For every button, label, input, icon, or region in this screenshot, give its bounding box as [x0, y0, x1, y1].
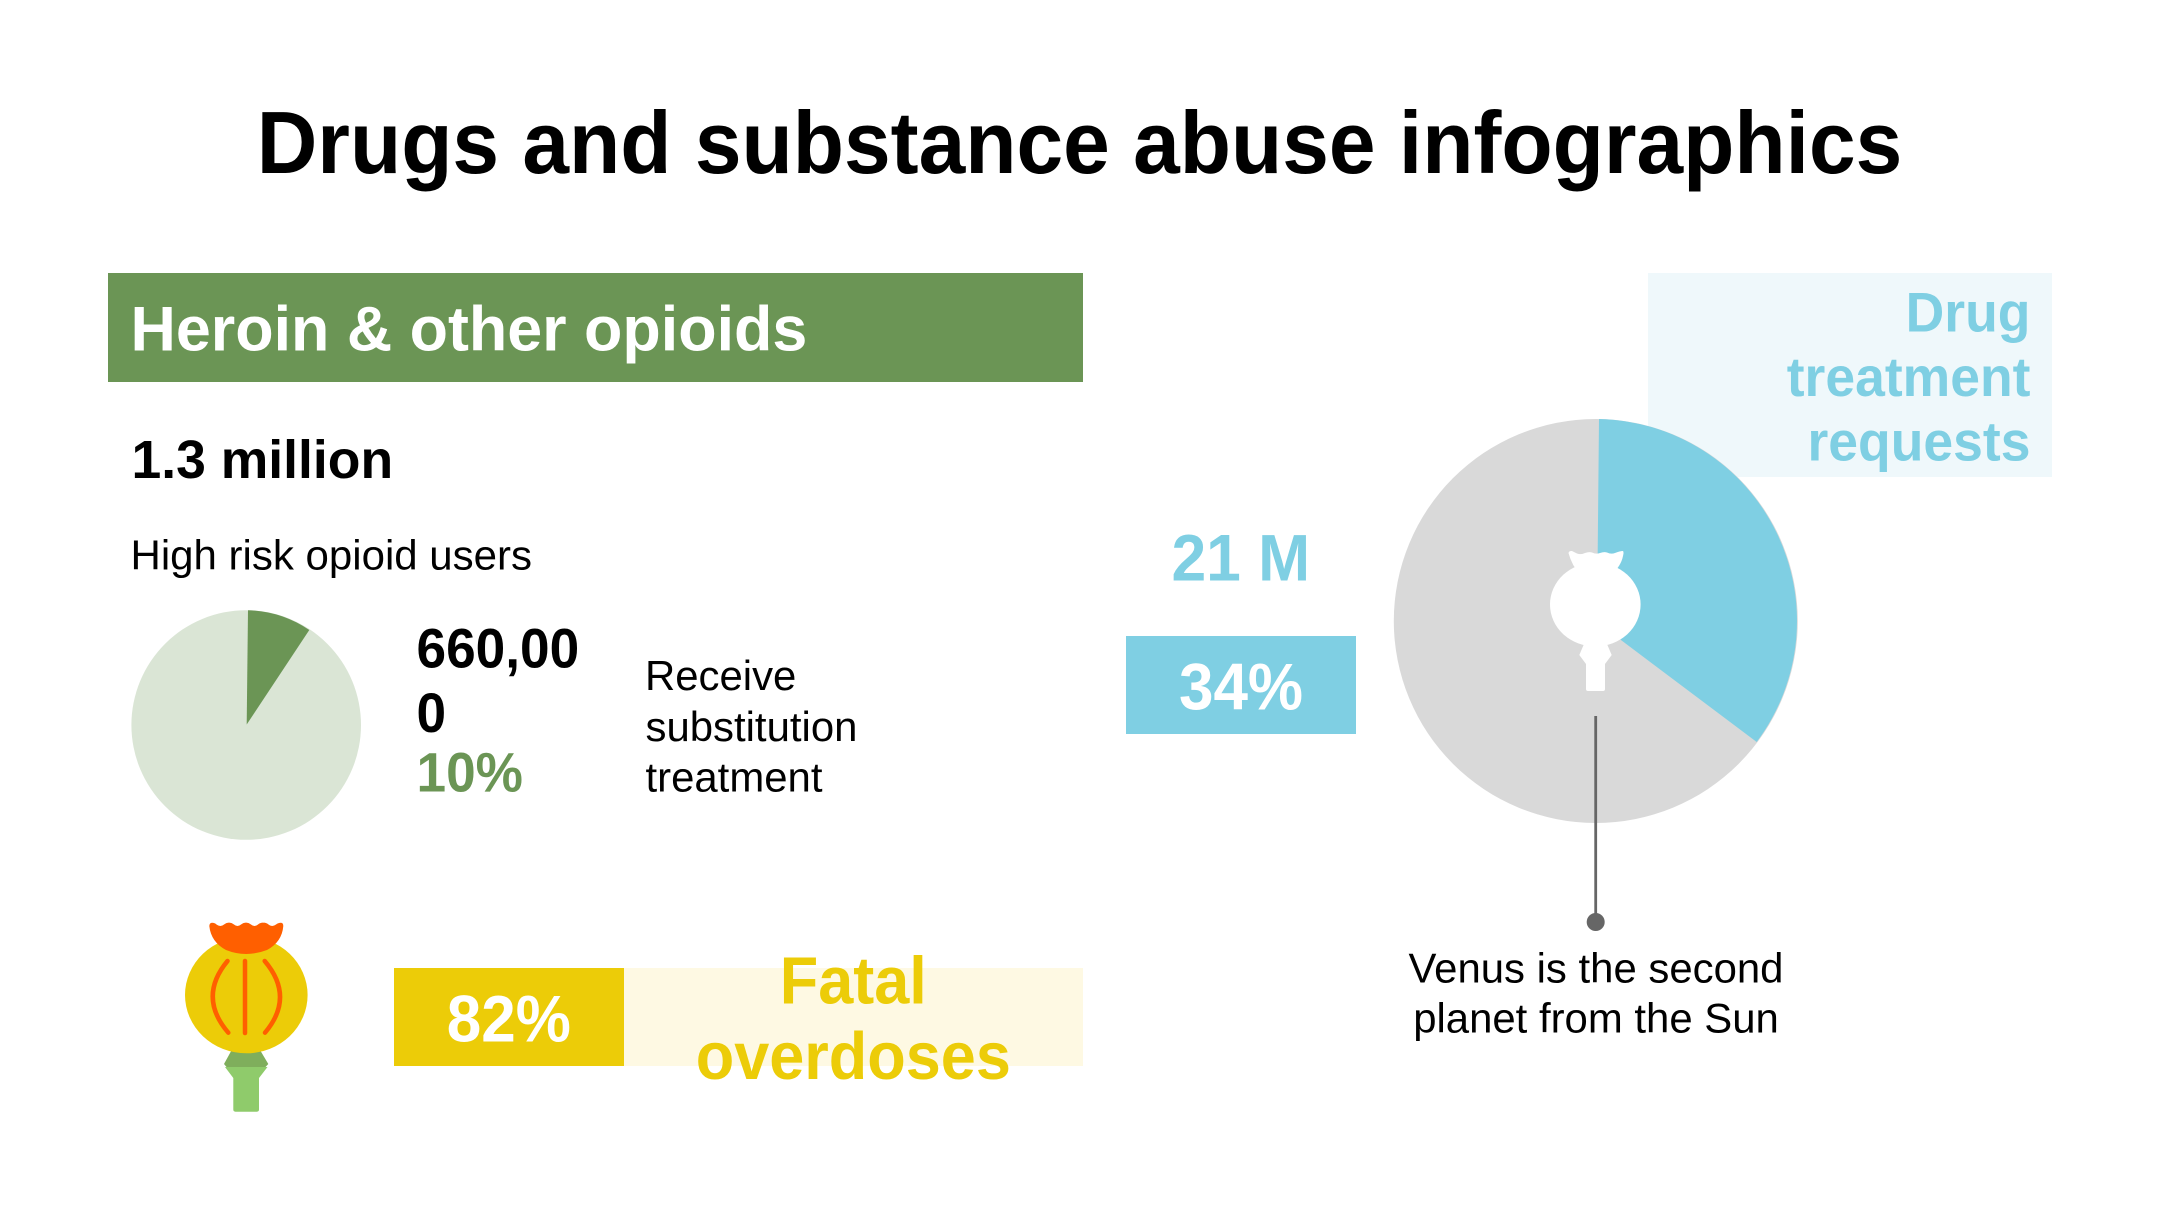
label box: fatal overdoses: overdoses [696, 1018, 1011, 1093]
stat box: 34%: 34% [1179, 650, 1303, 724]
heading banner [108, 273, 1083, 382]
stat: 660,000 and 10%: 660,00 [416, 617, 579, 680]
text: venus note [1409, 944, 1783, 1042]
label box: drug treatment requests: Drug [1906, 282, 2030, 344]
stat: 1.3 million: 1.3 million [132, 431, 393, 490]
leader line with dot [1587, 716, 1605, 931]
text: receive substitution treatment [645, 652, 857, 800]
pie chart: 34 percent [1394, 419, 1798, 823]
label box: fatal overdoses [624, 943, 1083, 1093]
heading banner: Heroin & other opioids [130, 294, 807, 364]
label box: drug treatment requests: treatment [1787, 346, 2030, 408]
stat: 660,000 and 10%: 10% [416, 741, 523, 804]
pie chart: 10 percent [131, 610, 361, 840]
panel: drug treatment requests [1126, 273, 2052, 1042]
label box: drug treatment requests: requests [1807, 411, 2030, 473]
stat box: 82%: 82% [447, 982, 571, 1056]
title: Drugs and substance abuse infographics [257, 94, 1902, 192]
stat: 660,000 and 10%: 0 [416, 682, 446, 744]
stat box: 82% [394, 968, 624, 1066]
label box: fatal overdoses: Fatal [780, 943, 927, 1018]
text: venus note: Venus is the second [1409, 944, 1783, 992]
text: receive substitution treatment: Receive [645, 652, 796, 699]
label box: drug treatment requests [1648, 273, 2052, 477]
icon: coloured poppy pod [185, 923, 308, 1112]
text: venus note: planet from the Sun [1413, 994, 1779, 1042]
panel: heroin and other opioids [108, 273, 1083, 1112]
label: high risk opioid users: High risk opioid users [130, 532, 532, 578]
icon: white poppy pod [1550, 551, 1641, 691]
text: receive substitution treatment: substitution [646, 703, 857, 750]
stat: 21 M: 21 M [1171, 521, 1310, 595]
stat: 660,000 and 10% [416, 617, 579, 804]
stat box: 34% [1126, 636, 1356, 734]
text: receive substitution treatment: treatment [646, 754, 823, 800]
